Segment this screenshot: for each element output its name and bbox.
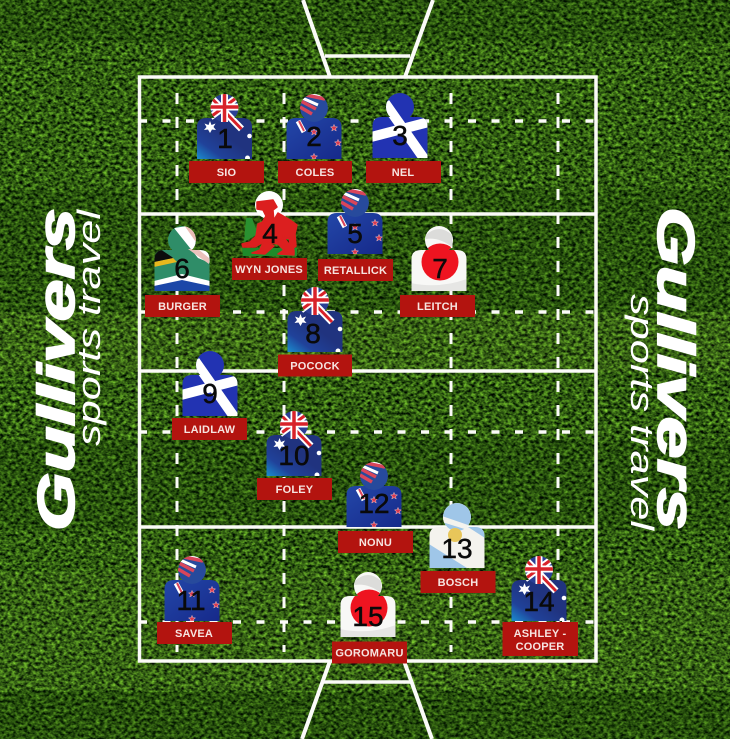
logo: right Gullivers sports travel [624, 207, 704, 531]
player 6 Burger: 6 [174, 253, 190, 284]
top goal posts [303, 0, 433, 77]
player 10 Foley: 10 [278, 440, 310, 471]
player 7 Leitch: 7 [432, 253, 448, 284]
player 5 Retallick: RETALLICK [324, 265, 387, 277]
player 11 Savea [157, 555, 232, 644]
logo: left Gullivers sports travel: sports travel [71, 209, 107, 446]
player 4 Wyn Jones: 4 [262, 218, 278, 249]
player 4 Wyn Jones: WYN JONES [235, 264, 303, 276]
player 4 Wyn Jones [232, 191, 307, 280]
player 2 Coles: COLES [296, 167, 334, 179]
player 3 Nel: NEL [392, 167, 414, 179]
player 1 Sio [189, 93, 264, 183]
player 8 Pocock: POCOCK [290, 360, 340, 372]
player 6 Burger: BURGER [158, 301, 207, 313]
player 11 Savea: SAVEA [175, 628, 213, 640]
player 14 Ashley-Cooper: COOPER [516, 641, 564, 653]
player 5 Retallick: 5 [347, 218, 363, 249]
player 15 Goromaru: GOROMARU [335, 648, 404, 660]
player 13 Bosch: 13 [441, 533, 473, 564]
player 8 Pocock: 8 [305, 318, 321, 349]
player 7 Leitch [400, 225, 475, 317]
player 3 Nel: 3 [392, 120, 408, 151]
player 14 Ashley-Cooper: ASHLEY - [514, 628, 567, 640]
player 12 Nonu: 12 [358, 488, 390, 519]
player 5 Retallick [318, 188, 393, 281]
logo: left Gullivers sports travel [28, 208, 107, 531]
logo: right Gullivers sports travel: Gullivers [646, 207, 704, 530]
player 1 Sio: SIO [217, 167, 237, 179]
player 9 Laidlaw: LAIDLAW [184, 424, 236, 436]
pitch markings [139, 0, 596, 739]
player 15 Goromaru: 15 [352, 601, 384, 632]
player 10 Foley: FOLEY [276, 484, 314, 496]
bottom goal posts [302, 661, 432, 739]
player 2 Coles [278, 93, 352, 183]
player 13 Bosch: BOSCH [438, 577, 478, 589]
player 11 Savea: 11 [176, 585, 206, 616]
player 9 Laidlaw: 9 [202, 378, 218, 409]
logo: right Gullivers sports travel: sports travel [624, 294, 660, 531]
player 9 Laidlaw [172, 350, 247, 440]
player 2 Coles: 2 [306, 121, 322, 152]
player 1 Sio: 1 [217, 123, 233, 154]
logo: left Gullivers sports travel: Gullivers [28, 208, 86, 531]
player 12 Nonu: NONU [359, 537, 392, 549]
player 14 Ashley-Cooper [502, 555, 578, 656]
player 13 Bosch [420, 502, 496, 593]
player 3 Nel [366, 92, 441, 183]
player 14 Ashley-Cooper: 14 [523, 586, 555, 617]
player 6 Burger [145, 225, 220, 317]
player 8 Pocock [278, 286, 352, 376]
player 15 Goromaru [332, 571, 407, 664]
player 12 Nonu [338, 461, 413, 553]
player 7 Leitch: LEITCH [417, 301, 458, 313]
player 10 Foley [257, 410, 332, 500]
